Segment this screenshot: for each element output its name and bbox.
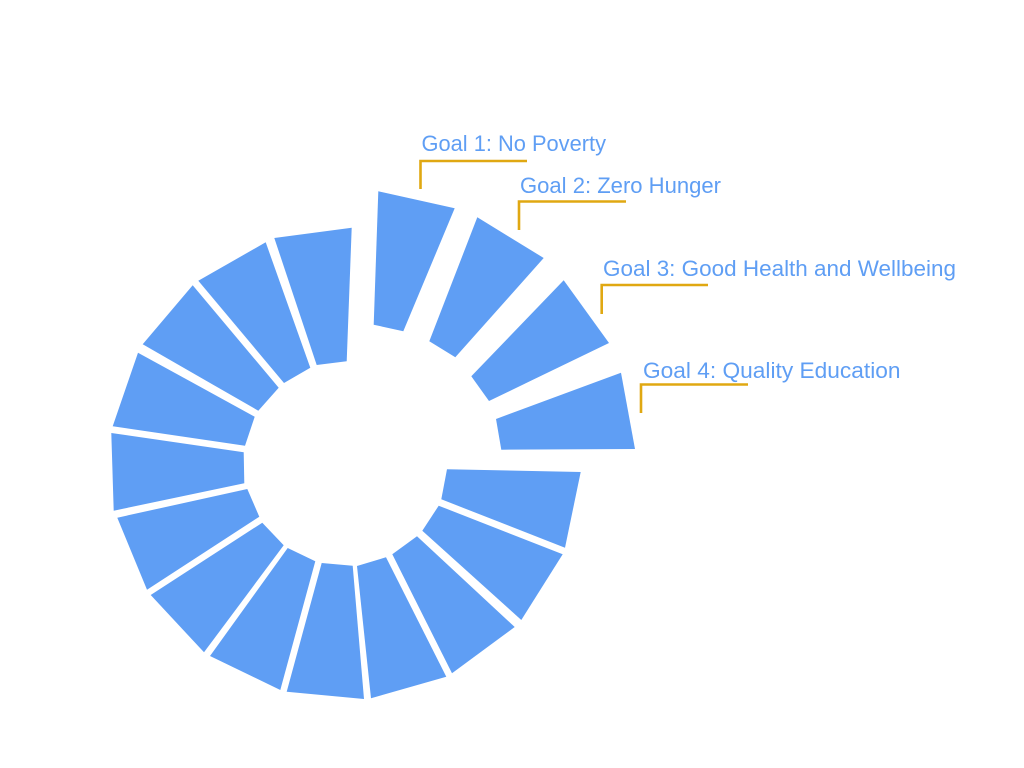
callout: goal 2 — [519, 173, 721, 230]
spiral ring of 18 segments — [111, 191, 635, 699]
segment 15 — [143, 285, 279, 411]
leader line: goal 2 — [519, 202, 626, 230]
label: goal 2: Goal 2: Zero Hunger — [520, 173, 721, 198]
segment 11 — [151, 523, 284, 652]
segment 17 — [274, 228, 352, 365]
callout: goal 1 — [420, 131, 606, 189]
segment 12 — [117, 489, 259, 590]
label: goal 4: Goal 4: Quality Education — [643, 358, 900, 383]
segment 8 — [357, 557, 446, 698]
callout: goal 4 — [641, 358, 900, 413]
leader line: goal 1 — [420, 161, 527, 189]
segment 7 — [392, 536, 515, 673]
segment 9 — [287, 563, 364, 699]
label: goal 3: Goal 3: Good Health and Wellbeing — [603, 256, 956, 281]
label: goal 1: Goal 1: No Poverty — [422, 131, 606, 156]
segment: goal 1 — [374, 191, 455, 331]
segment: goal 2 — [429, 217, 544, 357]
segment 16 — [198, 242, 310, 383]
leader line: goal 3 — [602, 285, 708, 314]
leader line: goal 4 — [641, 384, 748, 413]
callout: goal 3 — [602, 256, 956, 314]
segment 6 — [422, 506, 563, 620]
segment: goal 3 — [471, 280, 609, 401]
segment 10 — [210, 548, 315, 690]
segment 13 — [111, 433, 244, 511]
segment 14 — [113, 353, 255, 446]
segment 5 — [441, 469, 581, 548]
segment: goal 4 — [496, 373, 635, 450]
